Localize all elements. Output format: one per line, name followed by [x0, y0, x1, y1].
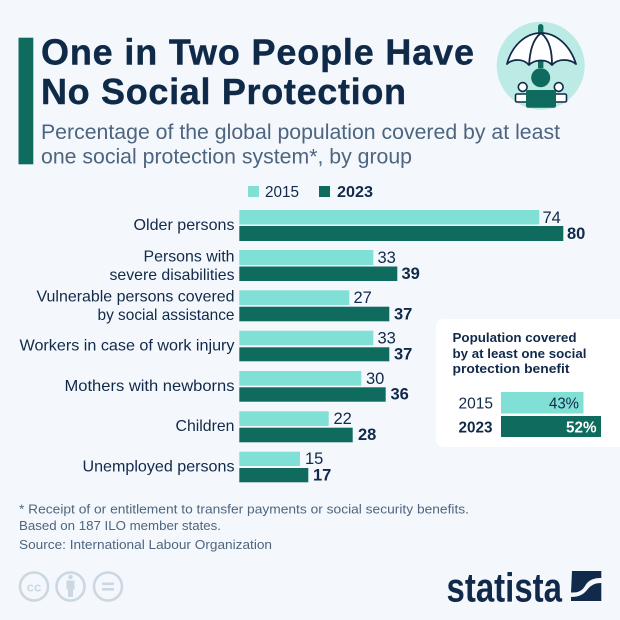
footnote and source: * Receipt of or entitlement to transfer payments or social security benefits.: [19, 502, 469, 516]
legend: [248, 184, 373, 201]
row: Older persons: [134, 209, 585, 243]
row: Mothers with newborns: Mothers with newborns: [64, 378, 234, 395]
row: Workers in case of work injury: Workers in case of work injury: [20, 338, 235, 354]
row: Unemployed persons: 17: [313, 466, 331, 484]
title: One in Two People Have: [41, 32, 474, 72]
panel heading: by at least one social: [452, 347, 586, 361]
icon: umbrella protecting people: [497, 22, 585, 110]
legend: 2015: [265, 184, 299, 201]
row: Unemployed persons: Unemployed persons: [82, 458, 234, 476]
panel bars: 2023: [458, 419, 493, 436]
row: Workers in case of work injury: 37: [394, 346, 412, 364]
row: Older persons: 74: [542, 209, 561, 227]
panel heading: Population covered: [452, 331, 576, 345]
row: Vulnerable persons covered by social assistance: by social assistance: [98, 307, 235, 324]
panel bars: 2015: [458, 395, 493, 412]
subtitle: [41, 121, 560, 168]
panel: population covered: [436, 319, 620, 447]
row: Persons with severe disabilities: 33: [378, 249, 396, 267]
row: Mothers with newborns: 30: [366, 370, 384, 388]
row: Unemployed persons: 15: [305, 450, 323, 468]
legend: 2023: [337, 184, 373, 201]
panel heading: [452, 331, 586, 376]
title: [41, 32, 474, 112]
row: Children: [176, 410, 376, 444]
row: Workers in case of work injury: 33: [378, 330, 396, 348]
panel bars: [458, 392, 601, 437]
row: Children: Children: [176, 418, 234, 435]
panel heading: protection benefit: [452, 362, 570, 376]
row: Vulnerable persons covered by social assistance: 37: [394, 306, 412, 324]
row: Persons with severe disabilities: [110, 248, 420, 284]
row: Vulnerable persons covered by social assistance: [36, 288, 412, 324]
title accent bar: [18, 38, 33, 164]
footnote and source: Source: International Labour Organization: [19, 538, 272, 552]
icon: creative commons licence: cc: [27, 580, 41, 594]
row: Older persons: 80: [567, 225, 585, 243]
row: Children: 22: [334, 410, 352, 428]
subtitle: Percentage of the global population covered by at least: [41, 121, 560, 144]
panel bars: 52%: [566, 419, 596, 436]
footnote and source: [19, 502, 469, 552]
row: Workers in case of work injury: [20, 330, 412, 364]
row: Vulnerable persons covered by social assistance: Vulnerable persons covered: [36, 288, 234, 306]
row: Children: 28: [358, 426, 376, 444]
icon: creative commons licence: [20, 572, 122, 600]
row: Persons with severe disabilities: severe disabilities: [110, 267, 234, 284]
bar chart: [20, 209, 585, 484]
row: Unemployed persons: [82, 450, 331, 484]
statista logo: statista: [446, 564, 563, 610]
row: Persons with severe disabilities: 39: [402, 265, 420, 283]
row: Vulnerable persons covered by social assistance: 27: [354, 289, 372, 307]
row: Older persons: Older persons: [134, 217, 234, 234]
row: Mothers with newborns: [64, 370, 409, 404]
title: No Social Protection: [41, 71, 406, 112]
footnote and source: Based on 187 ILO member states.: [19, 519, 221, 533]
row: Persons with severe disabilities: Persons with: [144, 248, 234, 266]
row: Mothers with newborns: 36: [390, 386, 409, 404]
panel bars: 43%: [549, 395, 579, 412]
subtitle: one social protection system*, by group: [41, 146, 412, 168]
